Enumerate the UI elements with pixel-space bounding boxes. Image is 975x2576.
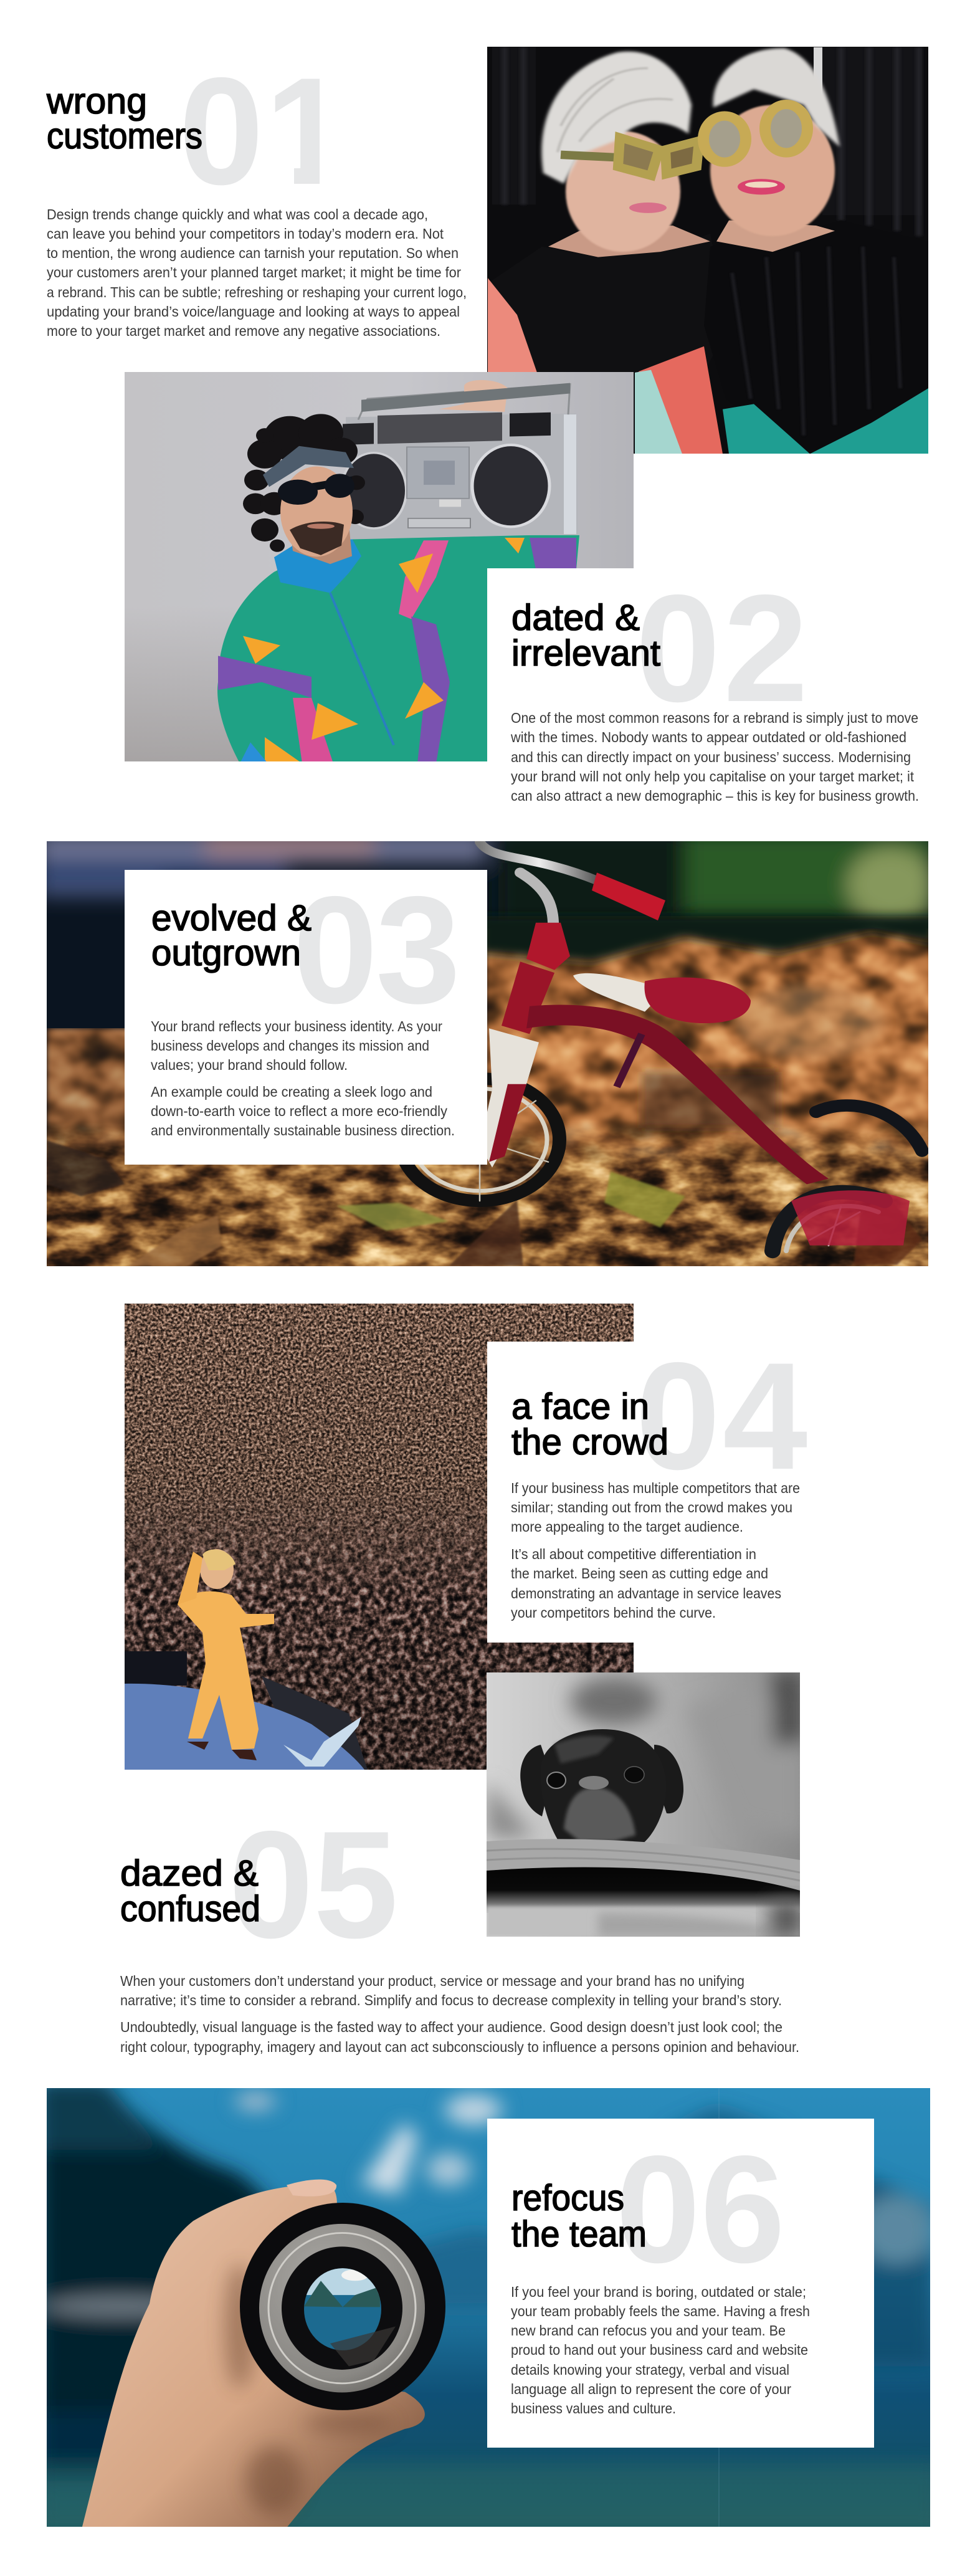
tricycle <box>400 842 922 1251</box>
text block: section 06 body: language all align to represent the core of your <box>511 2381 791 2397</box>
heading: wrong customers <box>46 81 202 156</box>
text block: section 04 body: your competitors behind the curve. <box>511 1605 716 1621</box>
number 06: 06 <box>616 2124 785 2294</box>
text block: section 06 body: details knowing your strategy, verbal and visual <box>511 2362 789 2378</box>
text block: section 01 body: updating your brand’s voice/language and looking at ways to appeal <box>47 303 460 320</box>
text block: section 06 body: proud to hand out your business card and website <box>511 2342 808 2358</box>
heading: dated & irrelevant: irrelevant <box>511 633 660 674</box>
heading: refocus the team: refocus <box>511 2178 624 2218</box>
text block: section 03 body: values; your brand should follow. <box>151 1057 348 1073</box>
panel: section 02 white notch <box>487 563 919 804</box>
text block: section 06 body: business values and culture. <box>511 2400 676 2416</box>
text block: section 04 body: It’s all about competitive differentiation in <box>511 1546 756 1562</box>
heading: a face in the crowd: a face in <box>511 1386 649 1427</box>
text block: section 06 body <box>511 2284 810 2416</box>
photo: red tricycle in autumn leaves <box>37 832 935 1266</box>
text block: section 05 body: narrative; it’s time to consider a rebrand. Simplify and focus to decrease complexity in telling your brand’s story. <box>120 1992 782 2008</box>
photo: two women in novelty glasses <box>487 42 930 457</box>
heading: a face in the crowd: the crowd <box>511 1422 668 1462</box>
icon: gold square glasses <box>561 138 699 176</box>
photo: man with boombox <box>125 372 634 763</box>
man's head <box>243 414 365 564</box>
heading: a face in the crowd <box>511 1386 668 1462</box>
photo: hand holding camera lens <box>37 2081 941 2532</box>
panel: section 05 dazed and confused <box>120 1799 799 2055</box>
heading: dazed & confused: confused <box>120 1889 260 1929</box>
text block: section 04 body: the market. Being seen as cutting edge and <box>511 1565 768 1581</box>
number 01: 01 <box>179 45 350 216</box>
text block: section 01 body: can leave you behind your competitors in today’s modern era. Not <box>47 226 444 242</box>
text block: section 02 body <box>510 710 919 804</box>
number 02: 02 <box>635 563 808 733</box>
number 03: 03 <box>293 864 460 1035</box>
text block: section 04 body: If your business has multiple competitors that are <box>511 1480 800 1496</box>
text block: section 03 body: down-to-earth voice to reflect a more eco-friendly <box>151 1103 447 1119</box>
heading: dazed & confused <box>120 1853 260 1929</box>
text block: section 05 body: right colour, typography, imagery and layout can act subconsciously to influence a persons opinion and behaviour. <box>120 2039 799 2055</box>
text block: section 06 body: new brand can refocus you and your team. Be <box>511 2322 786 2339</box>
jacket <box>217 535 579 763</box>
text block: section 06 body: If you feel your brand is boring, outdated or stale; <box>511 2284 806 2300</box>
text block: section 04 body: more appealing to the target audience. <box>511 1519 743 1535</box>
text block: section 01 body: more to your target market and remove any negative associations. <box>47 323 440 339</box>
heading: evolved & outgrown: evolved & <box>151 898 312 938</box>
text block: section 05 body: Undoubtedly, visual language is the fasted way to affect your audience. Good design doesn’t just look cool; the <box>120 2019 782 2035</box>
text block: section 04 body: similar; standing out from the crowd makes you <box>511 1499 792 1515</box>
photo: singer on stage before crowd <box>125 1304 634 1770</box>
photo: black pug resting on bench <box>487 1670 804 1938</box>
pug <box>520 1729 683 1844</box>
heading: dated & irrelevant: dated & <box>511 598 640 638</box>
text block: section 03 body: and environmentally sustainable business direction. <box>151 1122 455 1138</box>
text block: section 01 body: Design trends change quickly and what was cool a decade ago, <box>47 206 428 222</box>
text block: section 03 body: Your brand reflects your business identity. As your <box>151 1018 442 1034</box>
text block: section 02 body: with the times. Nobody wants to appear outdated or old-fashioned <box>510 729 906 745</box>
text block: section 01 body: a rebrand. This can be subtle; refreshing or reshaping your current logo, <box>47 284 467 300</box>
number 05: 05 <box>229 1799 398 1970</box>
text block: section 02 body: and this can directly impact on your business’ success. Modernising <box>511 749 911 765</box>
text block: section 02 body: One of the most common reasons for a rebrand is simply just to move <box>511 710 918 726</box>
text block: section 03 body: business develops and changes its mission and <box>151 1038 429 1054</box>
hand back <box>81 2183 425 2532</box>
heading: wrong customers: wrong <box>46 81 147 122</box>
icon: camera lens <box>240 2203 445 2410</box>
text block: section 03 body <box>151 1018 455 1138</box>
text block: section 02 body: your brand will not only help you capitalise on your target market; it <box>511 768 914 785</box>
heading: evolved & outgrown: outgrown <box>151 933 301 973</box>
heading: dazed & confused: dazed & <box>120 1853 259 1894</box>
boombox <box>341 380 578 540</box>
number 04: 04 <box>635 1330 807 1501</box>
thumb and finger tips <box>287 2180 336 2197</box>
heading: refocus the team <box>511 2178 647 2254</box>
text block: section 05 body <box>120 1973 799 2055</box>
text block: section 05 body: When your customers don’t understand your product, service or message and your brand has no unifying <box>120 1973 744 1989</box>
heading: dated & irrelevant <box>511 598 660 674</box>
text block: section 01 body: to mention, the wrong audience can tarnish your reputation. So when <box>47 245 459 261</box>
text block: section 04 body <box>511 1480 800 1621</box>
text block: section 02 body: can also attract a new demographic – this is key for business growth. <box>511 788 919 804</box>
singer in yellow suit <box>178 1549 274 1760</box>
heading: evolved & outgrown <box>151 898 312 973</box>
text block: section 01 body: your customers aren’t your planned target market; it might be time for <box>47 264 461 280</box>
heading: refocus the team: the team <box>511 2214 647 2254</box>
panel: section 06 text card <box>487 2119 874 2448</box>
text block: section 06 body: your team probably feels the same. Having a fresh <box>511 2303 810 2319</box>
panel: section 03 text card <box>125 864 487 1165</box>
icon: gold round glasses <box>703 105 807 162</box>
heading: wrong customers: customers <box>47 116 202 156</box>
panel: section 01 wrong customers <box>46 77 466 339</box>
bench <box>487 1839 800 1891</box>
text block: section 01 body <box>47 206 467 339</box>
text block: section 04 body: demonstrating an advantage in service leaves <box>511 1585 781 1601</box>
panel: section 04 text card <box>487 1330 807 1643</box>
stage <box>125 1651 368 1770</box>
text block: section 03 body: An example could be creating a sleek logo and <box>151 1084 432 1100</box>
